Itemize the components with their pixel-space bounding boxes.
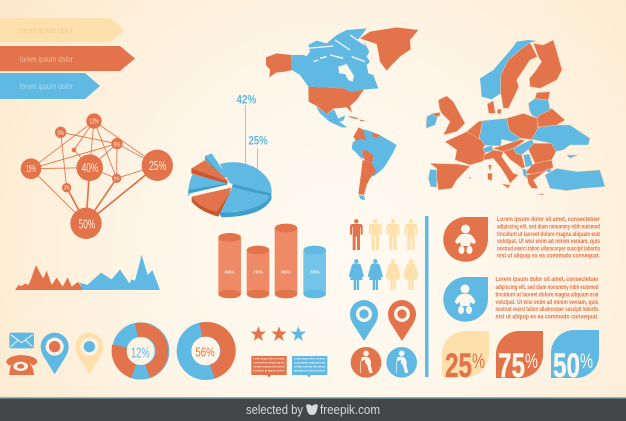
stat tile 25%	[442, 331, 489, 385]
icon: baby blue	[443, 277, 488, 322]
stat tile 75%	[496, 331, 543, 385]
network diagram	[21, 113, 173, 239]
network diagram: 12%	[90, 117, 99, 126]
network diagram: 50%	[79, 216, 95, 231]
stat tile 50%	[551, 330, 599, 385]
banner: orange: lorem ipsum dolor	[20, 54, 73, 64]
banner: blue: lorem ipsum dolor	[20, 81, 73, 91]
speech box: orange: sed diam nonummy nibh euismod	[253, 365, 285, 369]
text block 2: tincidunt ut laoreet dolore magna aliquam erat	[496, 292, 598, 298]
donut 12%: 12%	[131, 345, 150, 361]
footer credit	[246, 403, 380, 417]
3D pie chart: 25%	[248, 134, 268, 148]
speech box: orange: tincidunt ut laoreet dolore	[253, 369, 285, 373]
pin: yellow with blue dot	[75, 333, 103, 374]
text block 2: volutpat. Ut wisi enim ad minim veniam, quis	[496, 300, 599, 306]
elder icon: blue	[386, 347, 417, 378]
vertical divider	[425, 216, 428, 377]
icon: envelope	[9, 333, 34, 348]
stat tile 50%: 50	[553, 347, 580, 385]
network diagram: 3%	[64, 186, 70, 192]
stat tile 75%: 75	[498, 347, 525, 385]
footer credit: freepik.com	[320, 403, 380, 417]
icon: telephone	[6, 355, 38, 375]
speech box: orange	[251, 356, 287, 378]
donut 56%	[184, 322, 236, 378]
banner: yellow: lorem ipsum dolor	[20, 25, 73, 35]
arrow banners	[0, 18, 135, 99]
network diagram: 40%	[82, 161, 98, 175]
text block 2: nisl ut aliquip ex ea commodo consequat.	[496, 314, 599, 320]
cylinder 78%: 78%	[310, 269, 320, 275]
speech box: blue: consectetuer adipiscing elit,	[294, 361, 326, 365]
elder icon: orange	[351, 347, 381, 378]
stat tile 50%: %	[580, 350, 593, 373]
network diagram: 6%	[114, 176, 120, 182]
3D pie chart	[188, 92, 272, 217]
text block 1: nisl ut aliquip ex ea commodo consequat.	[497, 254, 600, 260]
donut 56%: 56%	[195, 345, 215, 360]
donut 12%	[112, 323, 168, 378]
speech box: blue: tincidunt ut laoreet dolore	[294, 369, 326, 373]
speech box: blue: sed diam nonummy nibh euismod	[294, 365, 326, 369]
footer credit: selected by	[246, 403, 304, 417]
text block 1: Lorem ipsum dolor sit amet, consectetuer	[497, 217, 601, 223]
icons: contact and pins	[6, 333, 103, 375]
speech box: blue: Lorem ipsum dolor sit amet,	[294, 357, 326, 361]
text block 1: volutpat. Ut wisi enim ad minim veniam, quis	[497, 239, 601, 245]
stat tile 75%: %	[525, 350, 538, 373]
text block 2: Lorem ipsum dolor sit amet, consectetuer	[496, 277, 599, 283]
footer bar	[0, 397, 626, 421]
network diagram: 25%	[149, 158, 166, 173]
3D pie chart: 42%	[236, 92, 257, 106]
network diagram: 15%	[26, 164, 36, 175]
map: Americas	[266, 27, 418, 200]
star rating	[251, 326, 306, 341]
speech box: blue	[292, 356, 327, 378]
network diagram: 9%	[57, 130, 64, 137]
cylinder 76%: 76%	[253, 269, 264, 275]
speech box: orange: consectetuer adipiscing elit,	[253, 361, 285, 365]
cylinder bar chart	[218, 224, 326, 298]
cylinder 90%: 90%	[281, 269, 292, 275]
people pictograms	[251, 219, 419, 378]
pin: blue with orange dot	[41, 333, 69, 374]
speech box: orange: Lorem ipsum dolor sit amet,	[253, 357, 285, 361]
icon: baby orange	[443, 217, 488, 262]
pin: orange	[388, 300, 416, 341]
text block 1: tincidunt ut laoreet dolore magna aliquam erat	[497, 232, 600, 238]
men row	[350, 219, 417, 250]
map: Europe	[426, 40, 605, 195]
area chart	[15, 255, 160, 294]
network diagram: 6%	[114, 141, 120, 148]
stat tile 25%: %	[472, 350, 485, 373]
women row	[349, 259, 419, 290]
text block 1	[497, 217, 601, 260]
stat tile 25%: 25	[445, 347, 472, 385]
text block 2	[496, 277, 599, 320]
pin: blue	[350, 300, 378, 341]
cylinder 46%: 46%	[225, 269, 235, 275]
